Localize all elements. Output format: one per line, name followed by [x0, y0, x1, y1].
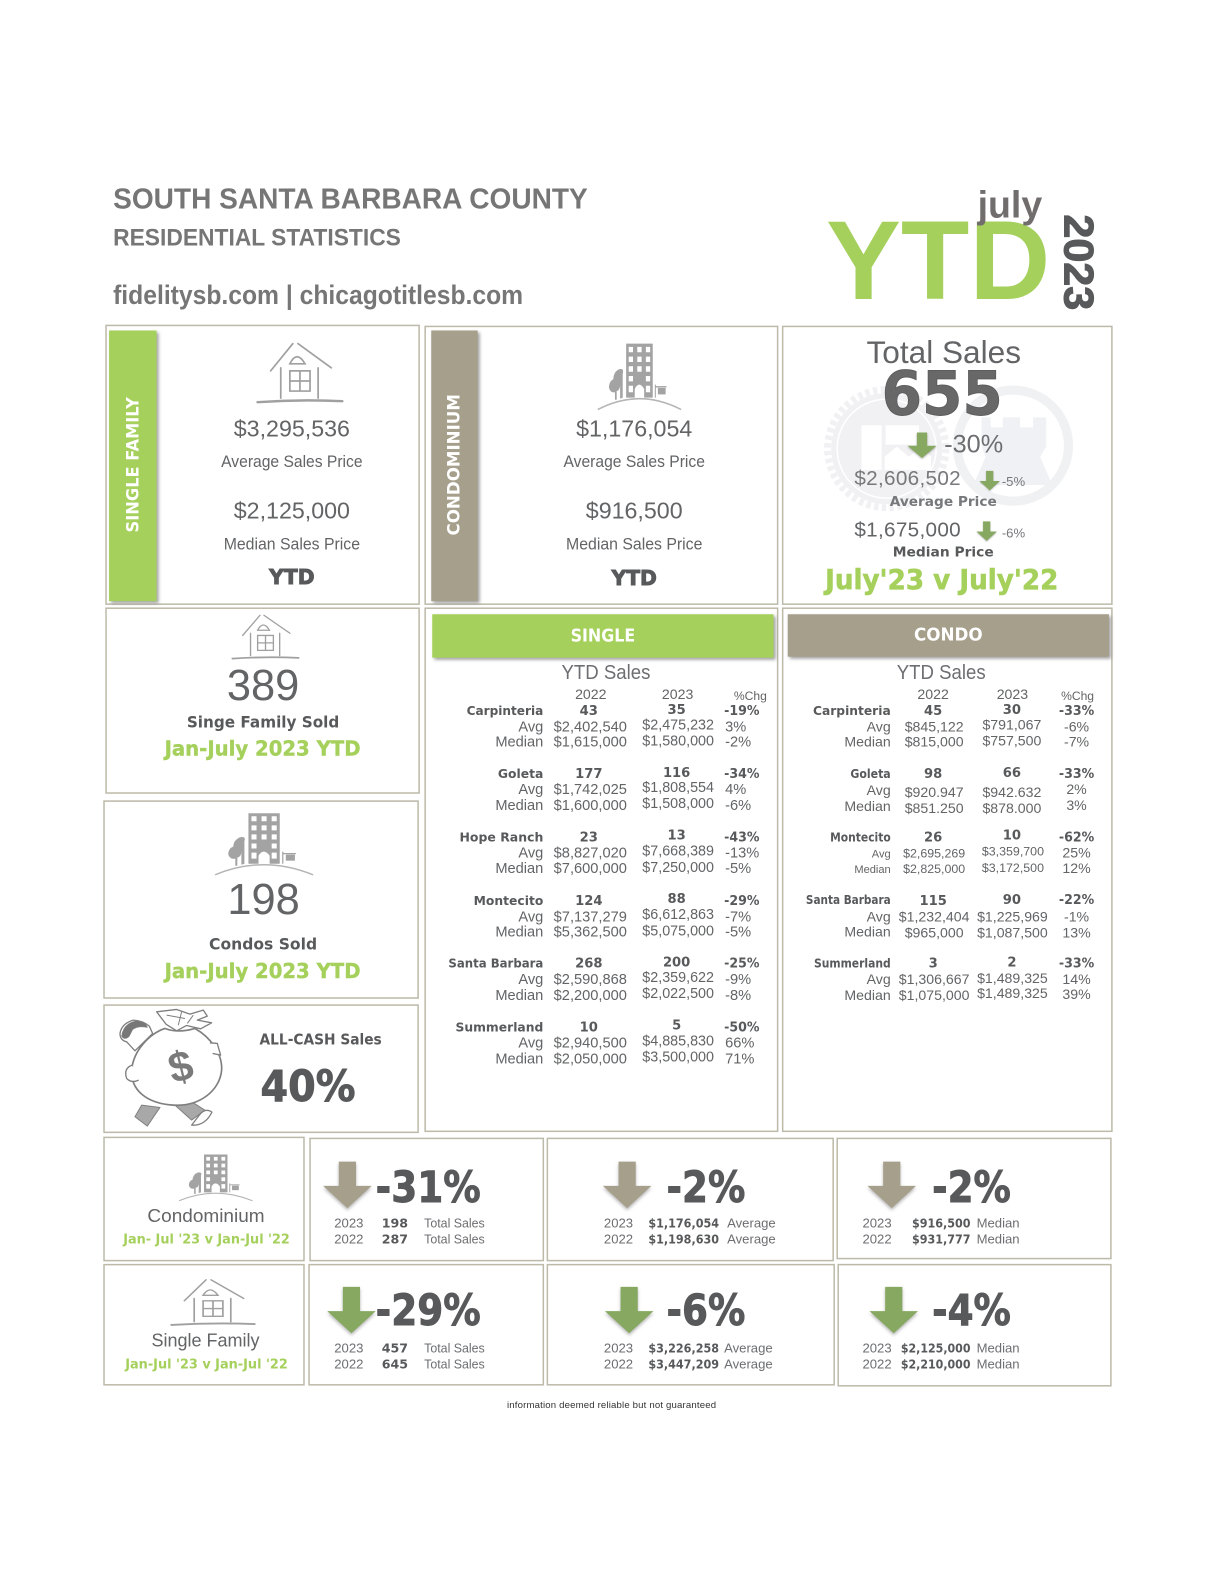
- comparison rows: Total Sales: [424, 1357, 485, 1372]
- comparison rows: Average: [727, 1215, 776, 1230]
- row: Santa Barbara: -9%: [725, 972, 751, 988]
- row: Hope Ranch: -13%: [725, 846, 759, 862]
- comparison rows: Median: [977, 1215, 1020, 1230]
- change: -2%: -2%: [932, 1164, 1011, 1213]
- change: -4%: -4%: [932, 1287, 1011, 1336]
- comparison rows: 287: [382, 1231, 408, 1246]
- row: Santa Barbara: $1,225,969: [977, 908, 1048, 924]
- row: Hope Ranch: $7,250,000: [642, 860, 714, 876]
- comparison label: July'23 v July'22: [823, 565, 1058, 596]
- comparison rows: $1,198,630: [648, 1231, 719, 1246]
- row: Santa Barbara: -8%: [725, 988, 751, 1004]
- header bar: single: [432, 614, 774, 658]
- row: Goleta: Avg: [518, 782, 543, 798]
- row: Goleta: $920.947: [905, 784, 964, 800]
- median sales price: [224, 497, 360, 554]
- row: Santa Barbara: $2,200,000: [554, 988, 627, 1004]
- row: Goleta: 3%: [1066, 797, 1087, 813]
- row: Summerland: -50%: [724, 1020, 759, 1035]
- row: Montecito: [830, 828, 1094, 876]
- row: Hope Ranch: [460, 828, 759, 877]
- comparison rows: 2022: [862, 1231, 892, 1246]
- date range: Jan-July 2023 YTD: [163, 737, 361, 761]
- date range: Jan-July 2023 YTD: [163, 959, 361, 983]
- comparison rows: 2022: [334, 1357, 363, 1372]
- row: Montecito: $5,362,500: [554, 924, 627, 940]
- panel: single family total sales change: [309, 1265, 543, 1385]
- row: Carpinteria: $845,122: [905, 718, 964, 734]
- panel: condominium comparison label: [104, 1137, 304, 1261]
- row: Goleta: Avg: [867, 782, 891, 798]
- row: Summerland: $1,306,667: [899, 971, 970, 987]
- row: Carpinteria: $1,615,000: [554, 735, 627, 751]
- row: Montecito: Median: [495, 924, 543, 940]
- row: Carpinteria: 43: [580, 704, 598, 719]
- median sales price: Median Sales Price: [566, 536, 702, 554]
- row: Goleta: $1,742,025: [554, 782, 627, 798]
- row: Goleta: $942.632: [982, 784, 1042, 800]
- comparison rows: 2022: [334, 1231, 363, 1246]
- column headers: %Chg: [1061, 689, 1094, 703]
- row: Summerland: 2: [1007, 956, 1016, 971]
- row: Hope Ranch: Hope Ranch: [460, 830, 543, 844]
- YTD label: YTD: [268, 565, 315, 589]
- row: Hope Ranch: Avg: [518, 846, 543, 862]
- row: Carpinteria: 45: [924, 704, 942, 719]
- comparison rows: Median: [977, 1340, 1020, 1355]
- comparison rows: 2023: [862, 1215, 892, 1230]
- column headers: %Chg: [734, 689, 767, 703]
- label: single family sold: Singe Family Sold: [187, 712, 339, 731]
- side bar: condominium: CONDOMINIUM: [445, 394, 465, 535]
- average sales price: [564, 416, 705, 471]
- column headers: 2022: [917, 686, 949, 702]
- row: Summerland: Median: [844, 987, 891, 1003]
- row: Summerland: 71%: [725, 1052, 754, 1068]
- panel: single family average price change: [547, 1265, 834, 1385]
- row: Goleta: 4%: [725, 782, 746, 798]
- row: Hope Ranch: $8,827,020: [554, 846, 627, 862]
- row: Goleta: -34%: [724, 767, 759, 782]
- average price: -5%: [1002, 474, 1025, 489]
- icon: house: [232, 615, 299, 659]
- row: Santa Barbara: Median: [495, 988, 543, 1004]
- row: Montecito: -5%: [725, 924, 751, 940]
- row: Montecito: $7,137,279: [554, 909, 627, 925]
- row: Hope Ranch: 13: [668, 828, 686, 843]
- header bar: condo: [788, 614, 1109, 657]
- footer disclaimer: information deemed reliable but not guaranteed: [507, 1400, 716, 1411]
- icon: condo building: [598, 344, 681, 410]
- row: Montecito: 25%: [1062, 845, 1091, 861]
- row: Montecito: 26: [924, 830, 942, 845]
- row: Goleta: 98: [924, 767, 942, 782]
- median sales price: $916,500: [586, 497, 683, 523]
- row: Montecito: $2,695,269: [903, 847, 965, 861]
- arrow: down tan: [868, 1162, 916, 1208]
- row: Santa Barbara: Santa Barbara: [448, 957, 543, 971]
- row: Carpinteria: Carpinteria: [813, 704, 891, 718]
- row: Goleta: [844, 766, 1094, 816]
- row: Summerland: $1,075,000: [899, 987, 970, 1003]
- row: Santa Barbara: -25%: [724, 957, 759, 972]
- panel: single family median price change: [838, 1265, 1111, 1386]
- row: Goleta: $878.000: [982, 800, 1042, 816]
- row: Goleta: -33%: [1059, 767, 1094, 782]
- average sales price: $1,176,054: [576, 416, 692, 442]
- arrow and change: total sales: -30%: [944, 431, 1003, 459]
- comparison rows: Total Sales: [424, 1215, 485, 1230]
- row: Goleta: $1,808,554: [642, 780, 714, 796]
- row: Montecito: -29%: [724, 894, 759, 909]
- row: Summerland: Median: [495, 1052, 543, 1068]
- date range: Jan- Jul '23 v Jan-Jul '22: [122, 1232, 290, 1247]
- comparison rows: [604, 1340, 773, 1372]
- median price: Median Price: [893, 545, 994, 561]
- row: Carpinteria: $791,067: [982, 716, 1042, 732]
- row: Goleta: Goleta: [498, 767, 543, 781]
- title: South Santa Barbara County: SOUTH SANTA BARBARA COUNTY: [113, 182, 588, 214]
- average price: $2,606,502: [854, 467, 961, 490]
- row: Santa Barbara: [448, 956, 759, 1004]
- row: Carpinteria: -33%: [1059, 704, 1094, 719]
- side bar: condominium: [431, 330, 478, 601]
- row: Goleta: Median: [495, 798, 543, 814]
- arrow: down green: [870, 1287, 918, 1333]
- row: Santa Barbara: Median: [844, 923, 891, 939]
- panel: single family YTD sales table: [425, 608, 778, 1131]
- row: Santa Barbara: Avg: [518, 972, 543, 988]
- panel: condominium YTD prices: [425, 326, 778, 604]
- comparison rows: 2022: [604, 1231, 633, 1246]
- row: Summerland: $2,940,500: [554, 1036, 627, 1052]
- row: Hope Ranch: Median: [495, 861, 543, 877]
- median sales price: [566, 497, 702, 554]
- big number: 655: 655: [882, 359, 1003, 429]
- row: Goleta: [495, 766, 759, 814]
- comparison rows: Average: [724, 1357, 773, 1372]
- row: Hope Ranch: 23: [580, 830, 598, 845]
- row: Summerland: $3,500,000: [642, 1050, 714, 1066]
- arrow and change: total sales: [907, 431, 1003, 459]
- row: Hope Ranch: -43%: [724, 830, 759, 845]
- table heading: YTD Sales: [562, 662, 650, 684]
- panel: single family YTD prices: [106, 325, 419, 604]
- panel: condos sold: [104, 801, 418, 998]
- change: -31%: -31%: [376, 1164, 481, 1213]
- comparison rows: Average: [727, 1231, 776, 1246]
- row: Carpinteria: $2,475,232: [642, 717, 714, 733]
- comparison rows: 2023: [604, 1215, 633, 1230]
- icon: condo building: [215, 813, 313, 875]
- row: Goleta: Median: [844, 798, 891, 814]
- row: Goleta: 177: [575, 767, 602, 782]
- row: Hope Ranch: $7,600,000: [554, 861, 627, 877]
- icon: house: [258, 344, 342, 402]
- row: Santa Barbara: 90: [1003, 893, 1021, 908]
- row: Montecito: 10: [1003, 828, 1021, 843]
- row: Goleta: 66: [1003, 766, 1021, 781]
- row: Hope Ranch: $7,668,389: [642, 844, 714, 860]
- comparison rows: 2023: [334, 1215, 363, 1230]
- row: Montecito: Montecito: [474, 894, 543, 908]
- row: Carpinteria: 3%: [725, 719, 746, 735]
- arrow: down tan: [323, 1162, 372, 1208]
- side bar: single family: [109, 330, 157, 601]
- row: Summerland: $2,050,000: [554, 1052, 627, 1068]
- arrow: down green: [327, 1287, 376, 1333]
- panel: total sales July: [783, 326, 1112, 604]
- comparison rows: [862, 1215, 1020, 1246]
- icon: condo building: [179, 1155, 252, 1201]
- row: Goleta: $1,508,000: [642, 796, 714, 812]
- number: 40%: 40%: [261, 1063, 355, 1112]
- comparison rows: 2023: [334, 1340, 363, 1355]
- row: Summerland: 10: [580, 1020, 598, 1035]
- row: Carpinteria: $757,500: [982, 733, 1042, 749]
- row: Summerland: [814, 956, 1094, 1003]
- row: Carpinteria: 35: [668, 703, 686, 718]
- row: Carpinteria: [813, 703, 1094, 750]
- row: Santa Barbara: Avg: [867, 908, 891, 924]
- table heading: YTD Sales: [897, 662, 986, 684]
- arrow: down tan: [603, 1162, 651, 1208]
- median price: $1,675,000: [854, 518, 961, 541]
- panel: single family sold: [106, 608, 419, 793]
- row: Santa Barbara: $2,022,500: [642, 986, 714, 1002]
- big period mark: YTD july 2023: 2023: [1055, 214, 1101, 310]
- row: Santa Barbara: $2,359,622: [642, 970, 714, 986]
- panel: condo YTD sales table: [783, 608, 1112, 1131]
- column headers: 2022: [575, 686, 607, 702]
- row: Santa Barbara: [806, 893, 1094, 940]
- average sales price: Average Sales Price: [221, 453, 363, 471]
- row: Montecito: Avg: [518, 909, 543, 925]
- row: Carpinteria: $2,402,540: [554, 719, 627, 735]
- comparison rows: 2022: [604, 1357, 633, 1372]
- label: condos sold: Condos Sold: [209, 935, 317, 954]
- row: Summerland: Avg: [867, 971, 891, 987]
- row: Santa Barbara: $2,590,868: [554, 972, 627, 988]
- column headers: [917, 686, 1094, 703]
- change: -29%: -29%: [376, 1287, 481, 1336]
- row: Summerland: $1,489,325: [977, 985, 1048, 1001]
- column headers: [575, 686, 767, 703]
- row: Carpinteria: -6%: [1064, 718, 1090, 734]
- row: Montecito: 88: [668, 892, 686, 907]
- label: all-cash sales: ALL-CASH Sales: [260, 1030, 382, 1048]
- row: Goleta: Goleta: [850, 767, 891, 781]
- row: Carpinteria: [467, 703, 759, 751]
- header bar: single: SINGLE: [571, 626, 635, 647]
- row: Santa Barbara: -1%: [1064, 908, 1090, 924]
- arrow: down green: [605, 1287, 653, 1333]
- median sales price: $2,125,000: [234, 497, 350, 523]
- row: Summerland: Avg: [518, 1036, 543, 1052]
- comparison rows: $3,226,258: [648, 1340, 719, 1355]
- row: Summerland: 3: [929, 957, 938, 972]
- row: Montecito: $3,172,500: [982, 861, 1044, 875]
- comparison rows: $916,500: [912, 1215, 971, 1230]
- icon: house: [171, 1280, 255, 1325]
- number: 198: 198: [227, 876, 300, 924]
- row: Montecito: Median: [854, 864, 891, 876]
- average sales price: Average Sales Price: [564, 453, 705, 471]
- row: Summerland: 5: [672, 1018, 681, 1033]
- comparison rows: 2022: [862, 1357, 892, 1372]
- comparison rows: $931,777: [912, 1231, 971, 1246]
- number: 389: 389: [227, 662, 299, 710]
- header bar: condo: CONDO: [914, 625, 983, 646]
- comparison rows: [334, 1215, 485, 1246]
- row: Summerland: Summerland: [814, 957, 891, 971]
- comparison rows: $2,125,000: [901, 1340, 971, 1355]
- comparison rows: [334, 1340, 485, 1372]
- comparison rows: 2023: [862, 1340, 892, 1355]
- comparison rows: $1,176,054: [648, 1215, 719, 1230]
- big period mark: YTD july 2023: july: [977, 183, 1043, 226]
- panel: condo median price change: [837, 1138, 1111, 1259]
- average sales price: $3,295,536: [234, 416, 350, 442]
- row: Summerland: $4,885,830: [642, 1033, 714, 1049]
- row: Montecito: -7%: [725, 909, 751, 925]
- comparison rows: Median: [977, 1231, 1020, 1246]
- column headers: 2023: [997, 686, 1028, 702]
- row: Montecito: $5,075,000: [642, 923, 714, 939]
- panel: single family comparison label: [104, 1265, 304, 1385]
- median price: -6%: [1002, 526, 1025, 541]
- subtitle: Residential Statistics: RESIDENTIAL STATISTICS: [113, 225, 401, 252]
- YTD label: YTD: [610, 566, 657, 590]
- side bar: single family: SINGLE FAMILY: [123, 397, 143, 532]
- change: -6%: -6%: [667, 1287, 745, 1336]
- comparison rows: [604, 1215, 776, 1246]
- comparison rows: Average: [724, 1340, 773, 1355]
- comparison rows: Total Sales: [424, 1340, 485, 1355]
- row: Montecito: $3,359,700: [982, 845, 1044, 859]
- row: Hope Ranch: -5%: [725, 861, 751, 877]
- row: Summerland: 39%: [1062, 986, 1091, 1002]
- dollar sign on bag: $: [163, 1041, 198, 1093]
- row: Carpinteria: Avg: [518, 719, 543, 735]
- comparison rows: $3,447,209: [648, 1357, 719, 1372]
- change: -2%: -2%: [667, 1164, 745, 1213]
- comparison rows: 2023: [604, 1340, 633, 1355]
- row: Goleta: 2%: [1066, 781, 1087, 797]
- row: Montecito: 12%: [1062, 860, 1091, 876]
- median price: [854, 518, 1025, 561]
- row: Carpinteria: $815,000: [905, 734, 964, 750]
- comparison rows: 645: [382, 1357, 408, 1372]
- website links: fidelitysb.com | chicagotitlesb.com: [113, 279, 523, 310]
- row: Goleta: $1,600,000: [554, 798, 627, 814]
- row: Carpinteria: Avg: [867, 718, 891, 734]
- average sales price: [221, 416, 363, 471]
- row: Santa Barbara: 200: [663, 956, 690, 971]
- comparison rows: Total Sales: [424, 1231, 485, 1246]
- average price: [854, 467, 1025, 510]
- row: Goleta: 116: [663, 766, 690, 781]
- row: Montecito: -62%: [1059, 830, 1094, 845]
- average price: Average Price: [890, 494, 997, 510]
- panel: condo average price change: [547, 1138, 833, 1261]
- row: Santa Barbara: Santa Barbara: [806, 893, 891, 907]
- row: Carpinteria: Median: [844, 734, 891, 750]
- comparison rows: 457: [382, 1340, 408, 1355]
- row: Goleta: -6%: [725, 798, 751, 814]
- row: Carpinteria: -2%: [725, 735, 751, 751]
- row: Summerland: $1,489,325: [977, 970, 1048, 986]
- comparison rows: Median: [977, 1357, 1020, 1372]
- row: Summerland: 14%: [1062, 971, 1091, 987]
- big period mark: YTD july 2023: YTD: [826, 198, 1050, 323]
- comparison rows: 198: [382, 1215, 408, 1230]
- date range: Jan-Jul '23 v Jan-Jul '22: [124, 1358, 288, 1373]
- watermark: seal and tower logos: [828, 390, 1068, 508]
- row: Santa Barbara: 268: [575, 957, 602, 972]
- row: Santa Barbara: $1,087,500: [977, 924, 1048, 940]
- row: Montecito: $2,825,000: [903, 862, 965, 876]
- row: Montecito: Montecito: [830, 830, 891, 844]
- row: Montecito: 124: [575, 894, 602, 909]
- comparison rows: [862, 1340, 1020, 1372]
- row: Carpinteria: -19%: [724, 704, 759, 719]
- row: Montecito: $6,612,863: [642, 907, 714, 923]
- row: Santa Barbara: -22%: [1059, 893, 1094, 908]
- row: Summerland: 66%: [725, 1036, 754, 1052]
- icon: man carrying money bag: [120, 1009, 222, 1126]
- row: Summerland: -33%: [1059, 957, 1094, 972]
- row: Santa Barbara: 115: [919, 894, 947, 909]
- label: condominium: Condominium: [147, 1206, 265, 1226]
- panel: all-cash sales: [104, 1005, 418, 1132]
- row: Carpinteria: Carpinteria: [467, 704, 543, 718]
- row: Carpinteria: -7%: [1064, 734, 1090, 750]
- row: Montecito: Avg: [872, 849, 891, 861]
- panel: condo total sales change: [310, 1138, 543, 1261]
- heading: total sales: Total Sales: [866, 335, 1021, 370]
- label: single family: Single Family: [151, 1330, 260, 1350]
- row: Montecito: [474, 892, 759, 940]
- row: Santa Barbara: $965,000: [905, 924, 964, 940]
- row: Summerland: [455, 1018, 759, 1068]
- row: Santa Barbara: $1,232,404: [899, 908, 970, 924]
- column headers: 2023: [662, 686, 693, 702]
- row: Carpinteria: $1,580,000: [642, 734, 714, 750]
- row: Carpinteria: 30: [1003, 703, 1021, 718]
- row: Santa Barbara: 13%: [1062, 924, 1091, 940]
- row: Carpinteria: Median: [495, 735, 543, 751]
- median sales price: Median Sales Price: [224, 536, 360, 554]
- row: Goleta: $851.250: [905, 800, 964, 816]
- comparison rows: $2,210,000: [901, 1357, 971, 1372]
- row: Summerland: Summerland: [455, 1020, 543, 1034]
